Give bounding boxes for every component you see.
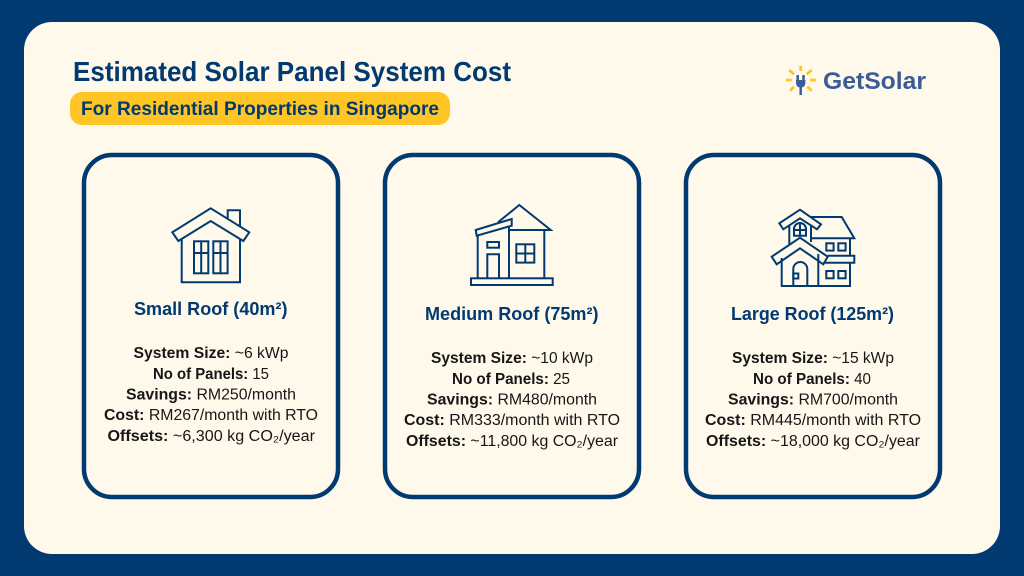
icon: small house	[172, 208, 249, 282]
details: small roof: Cost: RM267/month with RTO	[104, 407, 318, 424]
details: medium roof: No of Panels: 25	[452, 371, 570, 388]
heading: small roof: Small Roof (40m²)	[134, 299, 288, 319]
details: large roof: Cost: RM445/month with RTO	[705, 412, 921, 429]
details: medium roof: Offsets: ~11,800 kg CO₂/year	[406, 433, 618, 450]
heading: medium roof: Medium Roof (75m²)	[425, 304, 599, 324]
details: small roof	[104, 345, 318, 445]
details: large roof: System Size: ~15 kWp	[732, 350, 894, 367]
icon: medium house	[471, 205, 553, 285]
icon: large house	[772, 210, 854, 286]
details: medium roof: System Size: ~10 kWp	[431, 350, 593, 367]
heading: large roof: Large Roof (125m²)	[731, 304, 894, 324]
details: small roof: Offsets: ~6,300 kg CO₂/year	[108, 428, 315, 445]
panel: large roof	[686, 155, 940, 497]
wordmark: GetSolar	[823, 68, 926, 95]
subtitle pill: For Residential Properties in Singapore	[81, 98, 439, 120]
details: large roof: No of Panels: 40	[753, 371, 871, 388]
details: small roof: Savings: RM250/month	[126, 386, 296, 404]
details: large roof: Savings: RM700/month	[728, 392, 898, 408]
subtitle pill	[70, 92, 450, 125]
details: small roof: No of Panels: 15	[153, 366, 269, 383]
panel: small roof	[84, 155, 338, 497]
icon: sun with plug	[786, 66, 816, 95]
details: large roof	[705, 350, 921, 450]
panel: medium roof	[385, 155, 639, 497]
details: medium roof	[404, 350, 620, 450]
details: small roof: System Size: ~6 kWp	[134, 345, 288, 362]
details: medium roof: Savings: RM480/month	[427, 392, 597, 408]
logo: GetSolar	[786, 66, 926, 95]
details: medium roof: Cost: RM333/month with RTO	[404, 412, 620, 429]
title: Estimated Solar Panel System Cost	[73, 56, 511, 87]
details: large roof: Offsets: ~18,000 kg CO₂/year	[706, 433, 920, 450]
